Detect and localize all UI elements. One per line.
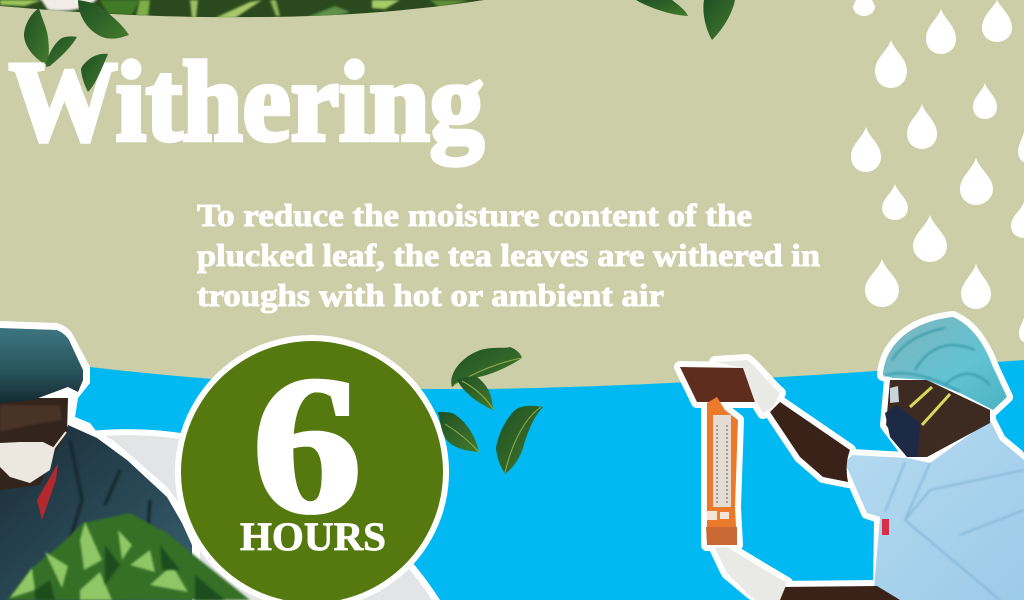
description text: troughs with hot or ambient air	[197, 277, 664, 313]
leaves: top left	[24, 0, 129, 67]
glove, upper	[715, 360, 780, 413]
hygrometer base	[706, 527, 737, 545]
photo: technician with hygrometer, right	[680, 317, 1024, 600]
neck and face	[886, 380, 990, 457]
hair net folds	[884, 328, 990, 392]
grey disc behind badge	[90, 429, 440, 600]
cap	[0, 328, 83, 403]
badge: 6 hours	[175, 335, 449, 600]
unit: HOURS	[240, 514, 386, 559]
raised arm	[770, 402, 850, 482]
background: blue wave	[0, 360, 1024, 600]
leaves: top centre	[636, 0, 735, 40]
description text: plucked leaf, the tea leaves are withered in	[197, 237, 820, 273]
jacket folds	[70, 440, 150, 540]
shirt	[845, 420, 1024, 600]
description text: To reduce the moisture content of the	[197, 197, 752, 233]
wooden board	[680, 367, 755, 402]
red collar	[37, 463, 58, 520]
lower arm	[780, 586, 900, 600]
leaf over title	[81, 54, 108, 92]
hygrometer label	[707, 511, 729, 520]
technician white outline	[680, 317, 1018, 594]
hygrometer	[707, 397, 738, 545]
shirt badge	[882, 519, 889, 535]
mask straps	[910, 387, 950, 425]
jacket	[0, 425, 192, 600]
hygrometer scale	[713, 415, 731, 507]
water drops	[851, 0, 1024, 342]
breathing mask	[885, 405, 920, 457]
number: 6	[252, 335, 362, 554]
leaves: centre cluster	[438, 347, 543, 474]
hair net	[883, 317, 1007, 410]
glasses	[890, 386, 899, 403]
description text	[197, 197, 820, 313]
photo: worker with leaves, left	[0, 321, 250, 600]
photo: tea leaves at top	[0, 0, 484, 18]
glove, lower	[715, 547, 787, 600]
forehead highlight	[0, 405, 62, 432]
title: Withering	[9, 38, 484, 165]
shirt folds	[885, 462, 1024, 600]
worker outline	[0, 321, 200, 600]
face mask	[0, 442, 55, 483]
face	[0, 398, 68, 490]
leaf bundle	[7, 513, 250, 600]
